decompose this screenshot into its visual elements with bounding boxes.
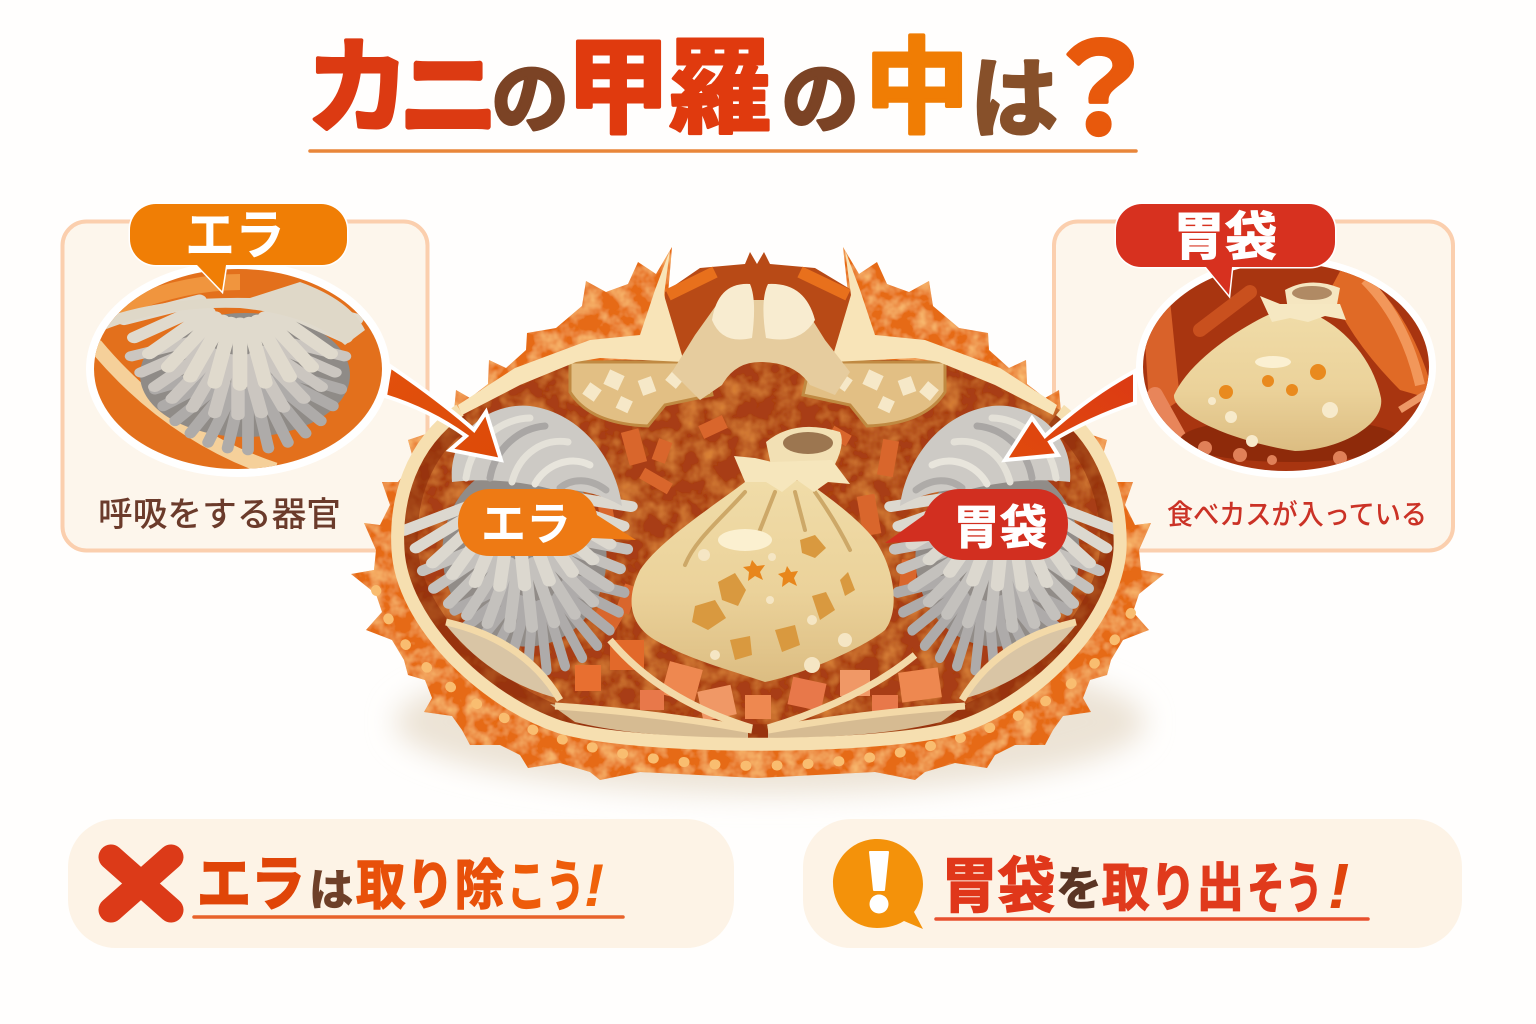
callout: stomach label: 胃袋 [1173, 209, 1277, 267]
title [306, 22, 1162, 161]
left carapace wedge edge [458, 250, 684, 415]
title: ？ [1038, 22, 1162, 161]
shell spots [376, 590, 1140, 766]
inner cavity [398, 360, 1120, 744]
gill removal message: ! [584, 852, 604, 919]
orange head bars [668, 272, 848, 295]
callout on crab: stomach: 胃袋 [953, 501, 1047, 554]
food splotches [692, 535, 855, 660]
lower cream membranes [446, 622, 1076, 730]
lump highlights [582, 369, 939, 413]
neck opening [766, 427, 842, 470]
title: の [491, 55, 569, 143]
gill removal message: は [309, 866, 353, 915]
panel: stomach [1054, 222, 1453, 550]
gill removal message: 取り除 [356, 856, 504, 916]
outer shell [351, 247, 1164, 780]
pleats [685, 492, 850, 565]
stomach sack [632, 427, 894, 682]
lower corner membrane right [966, 625, 1076, 698]
title: カ [306, 31, 410, 147]
stomach removal message: 胃袋 [941, 853, 1055, 920]
icon: warning bubble [833, 839, 923, 929]
stomach removal message: そう [1247, 857, 1323, 920]
neck hole [783, 432, 833, 454]
title underline [310, 149, 1136, 153]
stomach removal message: ! [1328, 850, 1349, 922]
caption: stomach: 食べカスが入っている [1167, 499, 1427, 530]
lower corner membrane left [446, 625, 556, 698]
left gill [398, 406, 647, 683]
arrow: gills detail to crab [385, 366, 501, 460]
face plate [672, 300, 850, 400]
crab shell illustration [351, 247, 1164, 780]
panel: take out stomach [803, 819, 1462, 948]
title: ニ [400, 41, 498, 151]
callout on crab: stomach [885, 489, 1068, 560]
right carapace wedge edge [831, 250, 1057, 415]
stomach removal message: を [1056, 863, 1102, 915]
inset: gills close-up [86, 260, 390, 480]
icon: cross [111, 857, 171, 910]
dark cavity edge [398, 410, 1120, 744]
face lobes [712, 284, 815, 340]
callout on crab: gills: エラ [481, 498, 571, 550]
gill removal message: こう [507, 855, 585, 918]
arrow: stomach detail to crab [1005, 371, 1135, 460]
crab shadow [395, 650, 1145, 794]
callout: gills label [130, 204, 347, 291]
callout on crab: gills [458, 489, 636, 556]
title: の [781, 55, 859, 143]
gill removal message: エラ [197, 851, 305, 918]
stomach removal message [941, 850, 1349, 922]
title: は [970, 50, 1058, 149]
title: 中 [865, 31, 969, 147]
highlight [718, 529, 772, 551]
right cream organ lump [803, 362, 945, 426]
caption: gills: 呼吸をする器官 [98, 496, 341, 534]
callout: stomach label [1116, 204, 1335, 295]
callout: gills label: エラ [185, 206, 285, 266]
underline [194, 915, 623, 919]
title: 甲 [566, 31, 670, 147]
panel: remove gills [68, 819, 734, 948]
stomach removal message: 取り出 [1102, 860, 1244, 918]
head and eyes [665, 252, 855, 365]
left cream organ lump [570, 362, 712, 426]
frill [734, 456, 850, 492]
lower tan bands [550, 704, 966, 738]
food flecks [698, 549, 852, 673]
inset: stomach close-up [1136, 260, 1436, 478]
cream inner rim [398, 410, 1120, 744]
underline [936, 917, 1368, 921]
right gill [875, 406, 1124, 683]
meat flakes [575, 415, 942, 721]
panel: gills [62, 222, 428, 550]
gill removal message [197, 851, 604, 919]
title: 羅 [668, 31, 772, 147]
